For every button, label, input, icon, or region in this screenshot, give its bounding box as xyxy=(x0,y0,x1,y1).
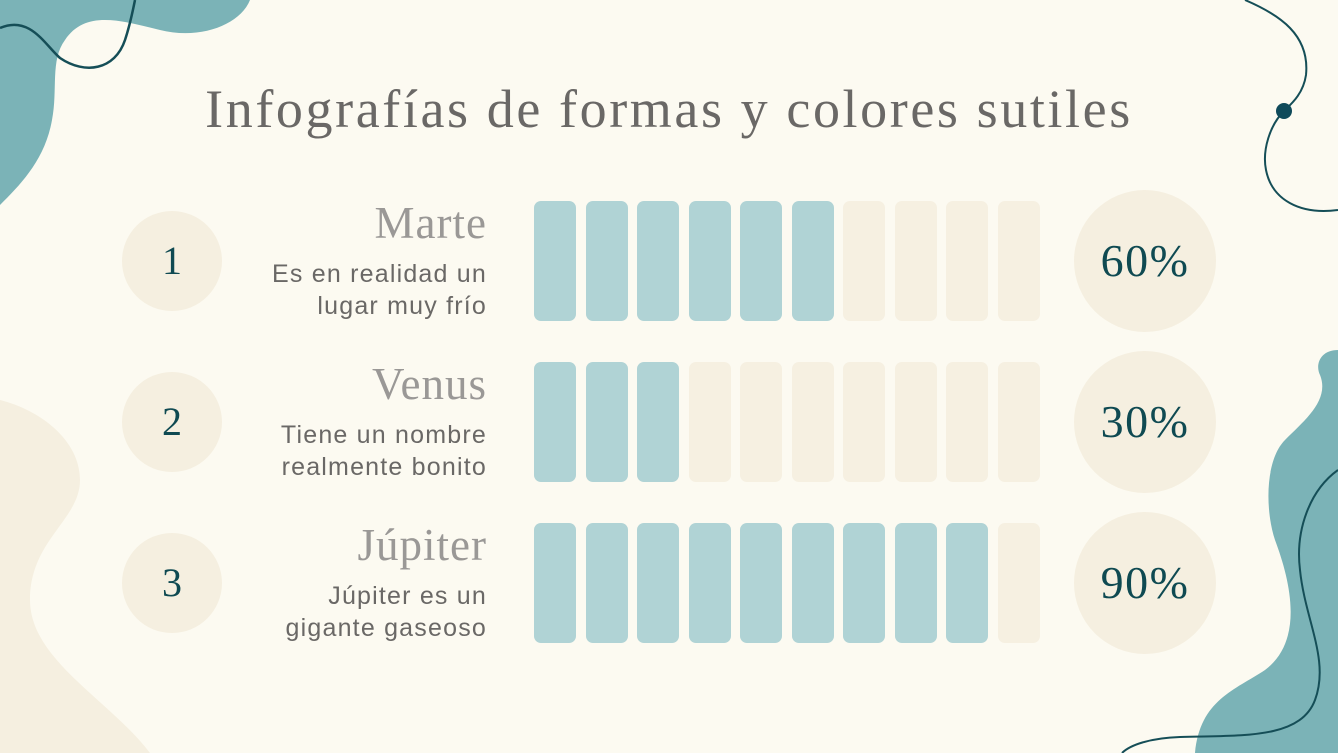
row 3: Júpiter xyxy=(122,512,1216,654)
label: Venus: realmente bonito xyxy=(282,453,487,481)
label: Júpiter: Júpiter es un xyxy=(328,582,487,610)
title: Infografías de formas y colores sutiles xyxy=(205,79,1133,139)
percentage 60% xyxy=(1074,190,1216,332)
label: Venus xyxy=(281,359,487,481)
blob: bottom-left beige xyxy=(0,400,150,753)
row 2: Venus xyxy=(122,351,1216,493)
label: Venus: Tiene un nombre xyxy=(281,421,487,449)
number badge 1 xyxy=(122,211,222,311)
label: Venus: Venus xyxy=(372,359,487,409)
bar chart: 30% xyxy=(534,362,1040,482)
label: Marte: Es en realidad un xyxy=(272,260,487,288)
bar chart: 90% xyxy=(534,523,1040,643)
percentage 30% xyxy=(1074,351,1216,493)
number badge 2: 2 xyxy=(162,399,182,444)
number badge 1: 1 xyxy=(162,238,182,283)
percentage 60%: 60% xyxy=(1101,235,1189,286)
number badge 3: 3 xyxy=(162,560,182,605)
label: Marte: lugar muy frío xyxy=(317,292,487,320)
number badge 3 xyxy=(122,533,222,633)
bar chart: 60% xyxy=(534,201,1040,321)
percentage 90% xyxy=(1074,512,1216,654)
label: Júpiter xyxy=(286,520,487,642)
label: Marte xyxy=(272,198,487,320)
percentage 30%: 30% xyxy=(1101,396,1189,447)
row 1: Marte xyxy=(122,190,1216,332)
label: Júpiter: gigante gaseoso xyxy=(286,614,487,642)
label: Marte: Marte xyxy=(375,198,487,248)
blob: top-left teal xyxy=(0,0,250,205)
blob: bottom-right teal xyxy=(1195,350,1338,753)
line: top-right curve with dot xyxy=(1245,0,1338,211)
label: Júpiter: Júpiter xyxy=(358,520,487,570)
percentage 90%: 90% xyxy=(1101,557,1189,608)
line: bottom-right curve xyxy=(1122,470,1338,753)
line: top-left curve xyxy=(0,0,135,68)
number badge 2 xyxy=(122,372,222,472)
